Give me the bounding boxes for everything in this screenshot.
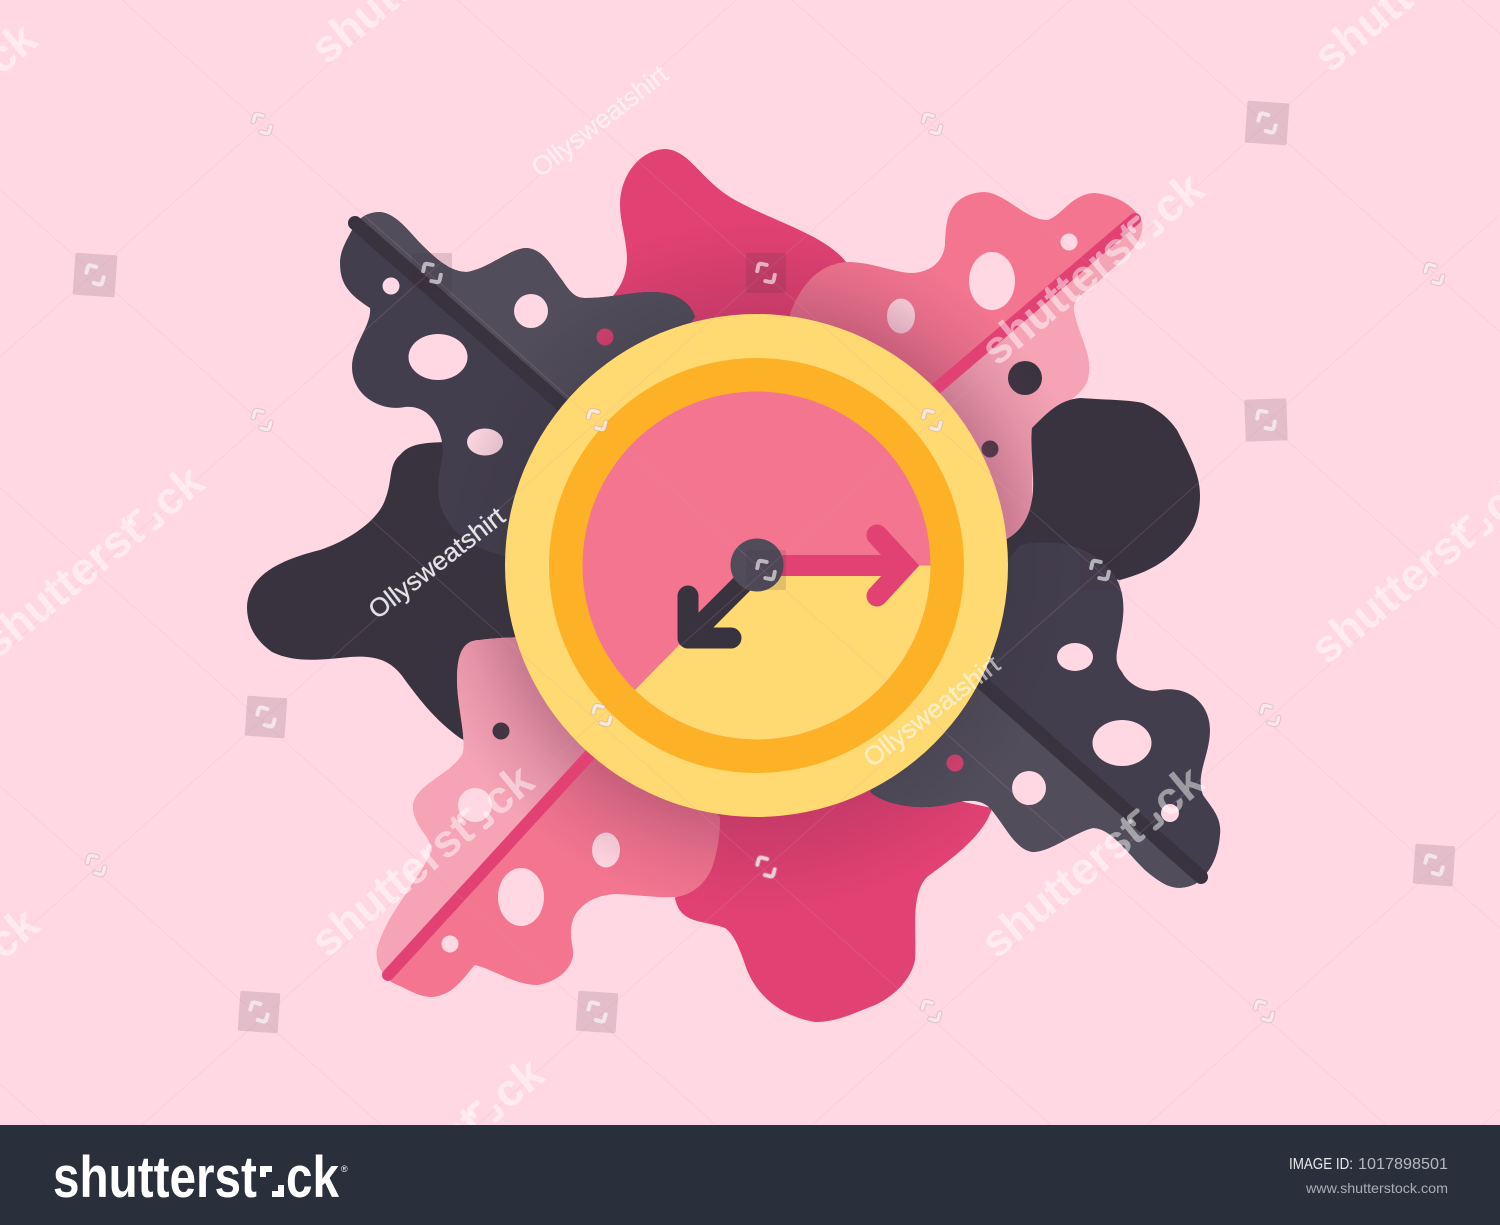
clock hub bbox=[730, 538, 784, 592]
stem line bbox=[970, 672, 1201, 877]
clock bbox=[505, 314, 1008, 817]
watermark: contributor name: Ollysweatshirt bbox=[525, 58, 674, 183]
blob: dark left bbox=[247, 442, 570, 760]
watermark: shutterstock text: shutterstock bbox=[970, 161, 1214, 375]
watermark: contributor name: Ollysweatshirt bbox=[857, 648, 1006, 773]
holes and dots bbox=[442, 722, 620, 952]
holes and dots bbox=[382, 278, 614, 456]
leaf: pink bottom left bbox=[376, 637, 720, 997]
watermark: shutterstock text: shutterstock bbox=[300, 753, 544, 967]
clock orange ring bbox=[549, 358, 964, 773]
watermark: square icons bbox=[73, 101, 1455, 1033]
stem line bbox=[388, 748, 596, 975]
watermark: small bracket icons bbox=[85, 114, 1445, 1021]
pale half of leaf bbox=[940, 220, 1142, 539]
blob: dark right bbox=[990, 398, 1200, 580]
footer bar bbox=[0, 1125, 1500, 1225]
leaf: pink top right bbox=[790, 192, 1142, 539]
stem line bbox=[355, 223, 570, 412]
image id: IMAGE ID: bbox=[1289, 1156, 1353, 1173]
leaf: dark top left bbox=[340, 212, 695, 556]
footer logo: shutterstock bbox=[53, 1145, 340, 1210]
illustration: splash blobs behind clock bbox=[247, 149, 1220, 1022]
lighter half of leaf bbox=[360, 212, 695, 400]
clock elapsed wedge bbox=[635, 566, 930, 739]
blob: hot pink bottom bbox=[675, 780, 992, 1022]
arrow: dark hour hand bbox=[688, 574, 752, 638]
clock face bbox=[582, 392, 930, 740]
holes and dots bbox=[946, 643, 1179, 822]
leaf: dark bottom right bbox=[870, 542, 1220, 888]
watermark: contributor name: Ollysweatshirt bbox=[362, 500, 511, 625]
image id number: 1017898501 bbox=[1358, 1156, 1448, 1173]
clock outer ring bbox=[505, 314, 1008, 817]
footer logo: ® bbox=[341, 1164, 348, 1174]
holes and dots bbox=[887, 234, 1078, 458]
watermark: contributor name bbox=[362, 58, 1006, 773]
website url: www.shutterstock.com bbox=[1305, 1180, 1448, 1196]
arrow: pink minute hand bbox=[775, 535, 905, 596]
blob: hot pink top bbox=[612, 149, 846, 400]
stem line bbox=[930, 219, 1135, 394]
lighter half of leaf bbox=[870, 688, 1197, 888]
watermark: shutterstock text: shutterstock bbox=[970, 754, 1214, 968]
pale half of leaf bbox=[377, 637, 586, 972]
